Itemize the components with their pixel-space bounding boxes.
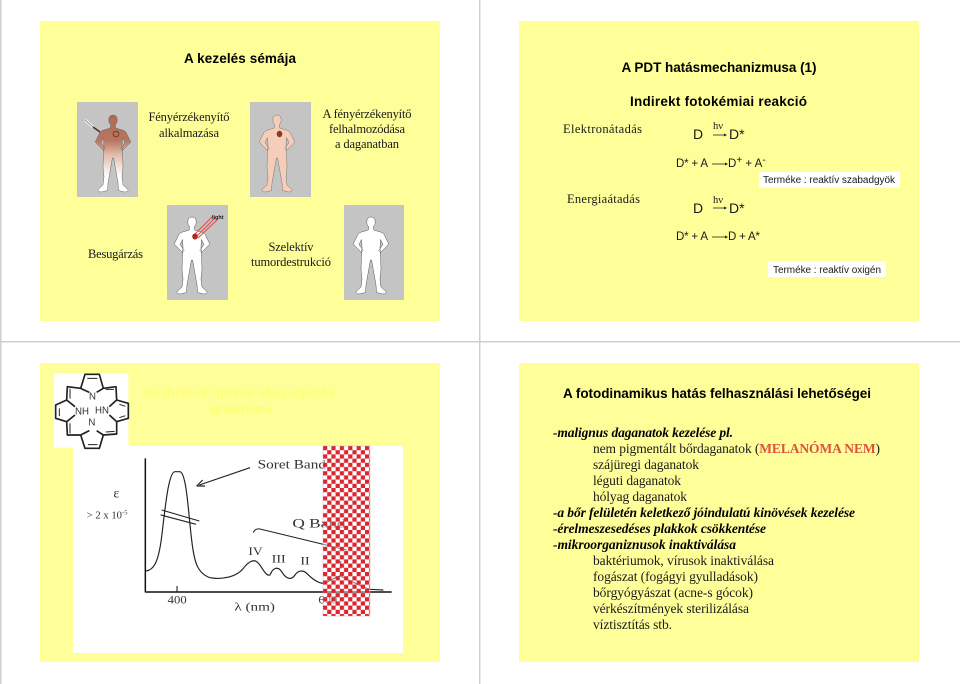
text block: list of uses xyxy=(553,425,880,632)
text block: list of uses: bőrgyógyászat (acne-s gócok) xyxy=(593,585,753,600)
reaction: electron transfer products: D xyxy=(728,158,736,170)
heading: faint yellow title xyxy=(145,386,335,416)
reaction: energy transfer excitation: D xyxy=(693,200,703,216)
text: irradiation: Besugárzás xyxy=(88,247,143,261)
reaction: electron transfer products: + xyxy=(736,155,742,166)
panel: applications of the photodynamic effect xyxy=(519,363,919,662)
diagram: porphyrin structure xyxy=(54,373,128,448)
reaction: electron transfer products: D* + A xyxy=(676,158,708,170)
arrow: Soret band pointer xyxy=(197,468,250,486)
text: selective tumour destruction: tumordestrukció xyxy=(251,255,331,269)
reaction: electron transfer excitation xyxy=(693,121,745,142)
panel: treatment scheme xyxy=(40,21,440,321)
chart: absorption spectrum xyxy=(87,458,392,614)
heading: faint yellow title: Porfirinok tipikus abszorpciós xyxy=(145,386,335,400)
text block: list of uses: -a bőr felületén keletkező jóindulatú kinövések kezelése xyxy=(553,505,855,520)
label: electron transfer: Elektronátadás xyxy=(563,122,642,136)
panel: porphyrin absorption spectrum xyxy=(40,363,440,662)
chart: absorption spectrum: III xyxy=(272,551,286,565)
reaction: electron transfer products: - xyxy=(762,155,766,166)
chart: absorption spectrum: I xyxy=(339,557,343,571)
reaction: energy transfer excitation: hν xyxy=(713,195,723,206)
chart background xyxy=(73,446,403,653)
diagram: porphyrin structure: N xyxy=(88,418,95,429)
text block: list of uses: léguti daganatok xyxy=(593,473,681,488)
chart: absorption spectrum: II xyxy=(300,553,310,567)
subheading: indirect photochemical reaction: Indirekt fotokémiai reakció xyxy=(630,94,807,109)
reaction: energy transfer products: D + A* xyxy=(728,231,761,243)
chart: absorption spectrum: > 2 x 10 xyxy=(87,510,122,521)
text: photosensitizer application: Fényérzékenyítő xyxy=(148,110,230,124)
heading: treatment scheme: A kezelés sémája xyxy=(184,51,296,66)
reaction: electron transfer excitation: D* xyxy=(729,126,745,142)
chart: absorption spectrum: 600 xyxy=(318,594,338,606)
heading: faint yellow title: spektruma xyxy=(208,402,272,416)
text block: list of uses: szájüregi daganatok xyxy=(593,457,699,472)
reaction: energy transfer products xyxy=(676,231,761,243)
text: accumulation in the tumour: felhalmozódása xyxy=(329,122,405,136)
heading: applications: A fotodinamikus hatás felhasználási lehetőségei xyxy=(563,386,871,401)
callout: free radical product xyxy=(759,172,900,188)
text: selective tumour destruction: Szelektív xyxy=(268,240,314,254)
panel: PDT mechanism xyxy=(519,21,919,321)
callout: free radical product: Terméke : reaktív szabadgyök xyxy=(763,175,896,186)
figure: body after treatment xyxy=(344,205,404,300)
text: selective tumour destruction xyxy=(251,240,331,269)
figure: irradiation with light: light xyxy=(212,215,224,221)
diagram: porphyrin structure: NH xyxy=(75,406,89,417)
callout: reactive oxygen product xyxy=(768,261,886,277)
chart: absorption spectrum: Q Band xyxy=(292,517,347,531)
text: accumulation in the tumour: A fényérzékenyítő xyxy=(322,107,412,121)
label: energy transfer: Energiaátadás xyxy=(567,192,640,206)
chart: absorption spectrum: IV xyxy=(248,544,263,558)
text block: list of uses: vérkészítmények sterilizálása xyxy=(593,601,749,616)
text block: list of uses: -malignus daganatok kezelése pl. xyxy=(553,425,733,440)
text block: list of uses: víztisztítás stb. xyxy=(593,617,672,632)
text block: list of uses: fogászat (fogágyi gyulladások) xyxy=(593,569,758,584)
reaction: energy transfer excitation: D* xyxy=(729,200,745,216)
text: accumulation in the tumour xyxy=(322,107,412,151)
highlight: therapeutic window checker band xyxy=(323,446,370,616)
text block: list of uses: -mikroorganiznusok inaktiválása xyxy=(553,537,736,552)
text: accumulation in the tumour: a daganatban xyxy=(335,137,400,151)
callout: reactive oxygen product: Terméke : reaktív oxigén xyxy=(773,265,881,276)
figure: photosensitizer application xyxy=(77,102,138,197)
reaction: electron transfer products xyxy=(676,155,766,170)
diagram: porphyrin structure: HN xyxy=(95,405,109,416)
heading: PDT mechanism: A PDT hatásmechanizmusa (1) xyxy=(622,60,816,75)
text: photosensitizer application: alkalmazása xyxy=(159,126,219,140)
reaction: electron transfer products: + A xyxy=(742,158,763,170)
text block: list of uses: -érelmeszesedéses plakkok csökkentése xyxy=(553,521,766,536)
chart: absorption spectrum: λ (nm) xyxy=(234,600,275,614)
reaction: energy transfer products: D* + A xyxy=(676,231,708,243)
figure: irradiation with light xyxy=(167,205,228,300)
diagram: porphyrin structure: N xyxy=(89,392,96,403)
text block: list of uses: hólyag daganatok xyxy=(593,489,687,504)
chart: absorption spectrum: -5 xyxy=(122,510,128,517)
figure: accumulation in the tumour xyxy=(250,102,311,197)
text block: list of uses: nem pigmentált bőrdaganatok (MELANÓMA NEM) xyxy=(593,441,880,456)
reaction: electron transfer excitation: D xyxy=(693,126,703,142)
reaction: energy transfer excitation xyxy=(693,195,745,216)
chart: absorption spectrum: 400 xyxy=(168,594,187,606)
chart: absorption spectrum: Soret Band xyxy=(258,458,327,472)
chart: absorption spectrum: ε xyxy=(113,486,119,501)
reaction: electron transfer excitation: hν xyxy=(713,121,723,132)
text block: list of uses: baktériumok, vírusok inaktiválása xyxy=(593,553,774,568)
absorption curve xyxy=(146,472,383,590)
text: photosensitizer application xyxy=(148,110,230,140)
